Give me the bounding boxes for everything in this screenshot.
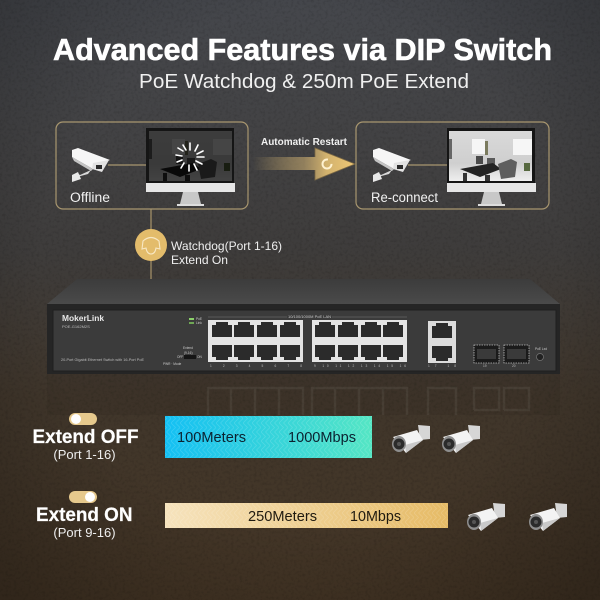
row: extend off: [32, 413, 480, 462]
label: extend off: Extend OFF: [32, 427, 138, 448]
dip switch: PWR · Mode: [163, 362, 181, 366]
label: watchdog: [171, 239, 282, 267]
switch reflection: [47, 373, 560, 415]
panel: offline: [56, 122, 248, 209]
label: offline: Offline: [70, 190, 110, 205]
bar: 100 meters: [165, 416, 372, 458]
icon: security camera: [72, 148, 110, 182]
brand logo: MokerLink: [62, 313, 104, 323]
label: watchdog: Extend On: [171, 253, 228, 267]
switch front: [47, 304, 560, 374]
monitor: live feed: [447, 128, 536, 206]
icon: toggle on: [69, 491, 97, 503]
icon: security camera: [373, 148, 411, 182]
port numbers: 19: [483, 364, 487, 368]
label: watchdog: Watchdog(Port 1-16): [171, 239, 282, 253]
uplink ports: [428, 321, 456, 363]
status leds: [189, 317, 202, 325]
icon: toggle off: [69, 413, 97, 425]
bar: 250 meters: 10Mbps: [350, 509, 401, 525]
description: 20-Port Gigabit Ethernet Switch with 16-Port PoE: [61, 358, 145, 362]
dip switch: ON: [197, 355, 202, 359]
network switch: [47, 279, 560, 374]
port numbers: 20: [512, 364, 516, 368]
icon: bullet camera: [467, 503, 505, 531]
status leds: PoE: [196, 317, 202, 321]
sfp ports: [474, 345, 529, 363]
model number: POE-G162M2S: [62, 324, 90, 329]
port numbers: [210, 364, 516, 368]
switch top: [47, 279, 560, 304]
label: automatic restart: Automatic Restart: [261, 136, 347, 148]
rule above ports: [208, 316, 407, 318]
icon: bullet camera: [529, 503, 567, 531]
label: re-connect: Re-connect: [371, 190, 438, 205]
bar: 100 meters: 100Meters: [177, 430, 246, 446]
network switch: 10/100/1000M PoE LAN: [288, 315, 332, 319]
monitor: offline feed: [146, 128, 235, 206]
label: extend on: Extend ON: [36, 505, 132, 526]
icon: bullet camera: [392, 425, 430, 453]
dip switch: Extend: [183, 346, 193, 350]
port block 9-16: [312, 320, 407, 362]
icon: loading spinner: [176, 143, 204, 171]
reset button: [535, 347, 547, 360]
row: extend on: [36, 491, 567, 540]
dip switch: [163, 346, 202, 366]
dip switch: (9-16): [184, 351, 193, 355]
subtitle: PoE Watchdog & 250m PoE Extend: [139, 70, 469, 93]
label: port range: (Port 9-16): [53, 525, 116, 540]
icon: watchdog badge: [135, 229, 167, 261]
bar: 250 meters: [165, 503, 448, 528]
port block 1-8: [208, 320, 303, 362]
port numbers: 17 18: [428, 364, 456, 368]
title: Advanced Features via DIP Switch: [53, 32, 552, 67]
port numbers: 1 2 3 4 5 6 7 8: [210, 364, 302, 368]
status leds: Link: [196, 321, 202, 325]
connector: watchdog line: [150, 209, 152, 280]
reset button: PoE Lxd: [535, 347, 547, 351]
arrow: automatic restart: [253, 148, 355, 180]
port numbers: 9 10 11 12 13 14 15 16: [314, 364, 406, 368]
label: port range: (Port 1-16): [53, 447, 116, 462]
panel: re-connect: [356, 122, 549, 209]
bar: 250 meters: 250Meters: [248, 509, 317, 525]
dip switch: OFF: [177, 355, 183, 359]
bar: 100 meters: 1000Mbps: [288, 430, 356, 446]
icon: bullet camera: [442, 425, 480, 453]
